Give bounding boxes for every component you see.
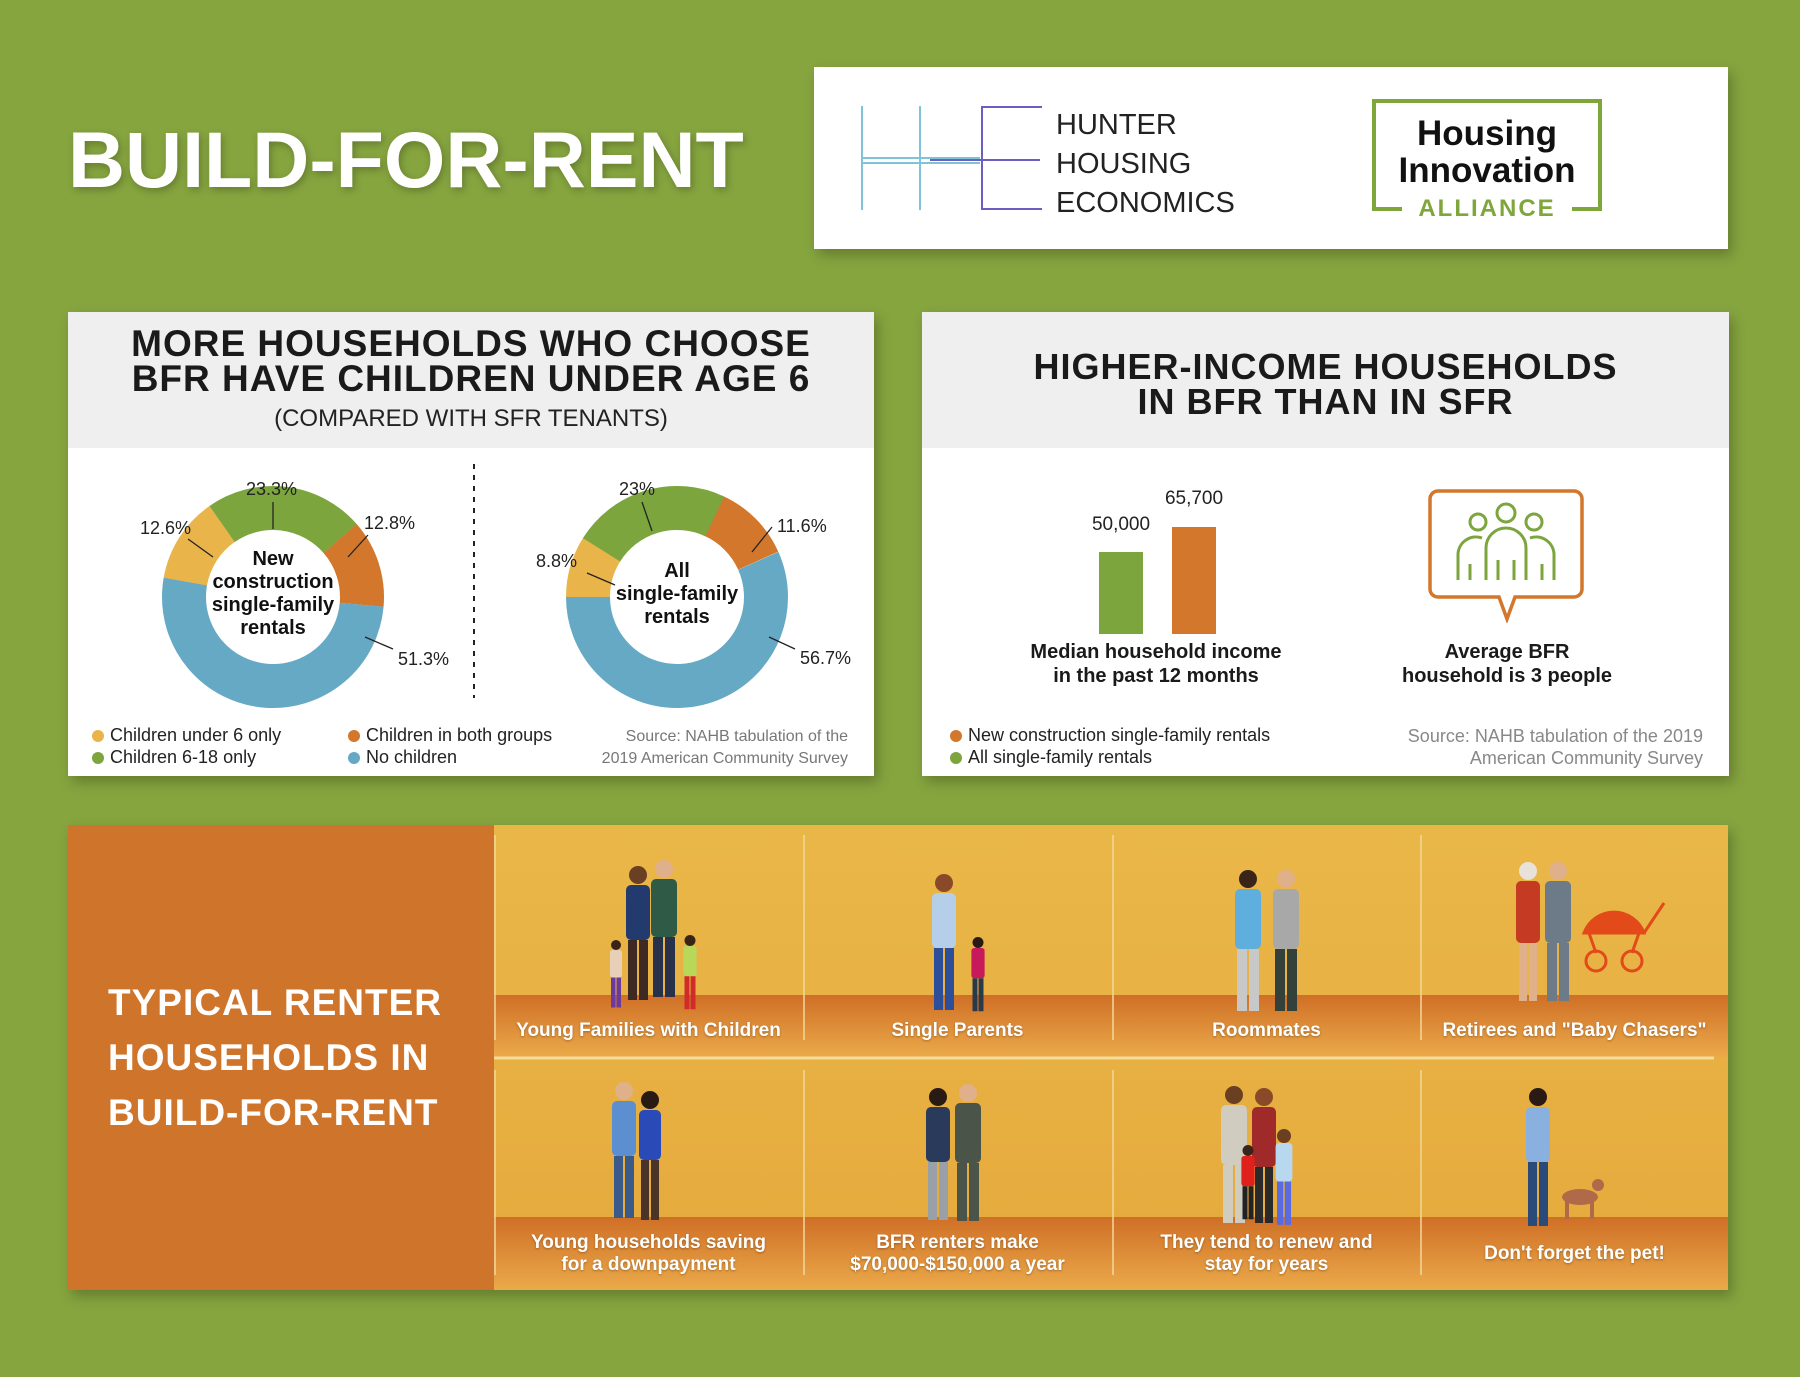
figures row 1	[610, 860, 1664, 1011]
heading: (COMPARED WITH SFR TENANTS)	[274, 405, 668, 432]
donut: all sfr: 56.7%	[800, 648, 851, 668]
legend: New construction single-family rentals	[968, 725, 1270, 745]
panel: typical renter households: Young households saving	[531, 1232, 766, 1253]
logo: housing innovation alliance	[1372, 99, 1602, 222]
panel: typical renter households: $70,000-$150,000 a year	[850, 1254, 1065, 1275]
tiles grid	[494, 825, 1728, 1290]
donut: new construction: 23.3%	[246, 479, 297, 499]
panel: children donuts	[68, 312, 874, 776]
panel: typical renter households: for a downpayment	[561, 1254, 736, 1275]
heading: BFR HAVE CHILDREN UNDER AGE 6	[132, 358, 810, 399]
source	[1408, 726, 1703, 768]
panel: typical renter households: BFR renters make	[876, 1232, 1039, 1253]
bar caption: in the past 12 months	[1053, 665, 1259, 687]
logo: hunter housing economics: HUNTER	[1056, 109, 1177, 141]
donut: new construction: 51.3%	[398, 649, 449, 669]
captions: Young Families with Children	[516, 1020, 781, 1041]
source: American Community Survey	[1470, 748, 1703, 768]
donut: new construction: New	[252, 548, 294, 570]
heading	[68, 312, 874, 448]
panel: children donuts: No children	[366, 747, 457, 767]
donut: all sfr: 11.6%	[777, 516, 827, 536]
side heading: BUILD-FOR-RENT	[108, 1092, 439, 1133]
divider	[473, 464, 475, 698]
donut charts	[140, 464, 851, 708]
legend: Children under 6 only	[110, 725, 281, 745]
panel: typical renter households: Single Parents	[892, 1020, 1024, 1041]
icon: family speech bubble	[1428, 489, 1584, 623]
icon caption	[1402, 641, 1612, 687]
title: BUILD-FOR-RENT	[68, 115, 744, 204]
donut: new construction: 12.6%	[140, 518, 191, 538]
donut: all sfr: 23%	[619, 479, 655, 499]
bar caption: Median household income	[1030, 641, 1282, 663]
bar chart: 65,700	[1165, 488, 1223, 509]
logo: housing innovation alliance: Housing	[1417, 114, 1557, 153]
source: 2019 American Community Survey	[602, 750, 848, 767]
bar caption	[1030, 641, 1282, 687]
panel: typical renter households	[68, 825, 1728, 1290]
panel: typical renter households: Roommates	[1212, 1020, 1321, 1041]
source	[602, 728, 848, 767]
side heading	[68, 825, 494, 1290]
donut: new construction	[140, 471, 449, 723]
panel: income: All single-family rentals	[968, 747, 1152, 767]
donut: all sfr	[536, 474, 851, 720]
logo: hunter housing economics: HOUSING	[1056, 148, 1191, 180]
donut: all sfr: rentals	[644, 606, 710, 628]
panel: typical renter households: They tend to renew and	[1160, 1232, 1373, 1253]
donut: new construction: single-family	[212, 594, 335, 616]
figures row 2	[612, 1082, 1604, 1226]
donut: all sfr: All	[664, 560, 690, 582]
panel: income	[922, 312, 1729, 776]
source: Source: NAHB tabulation of the	[626, 728, 848, 745]
logo: hunter housing economics	[861, 106, 1235, 219]
donut: all sfr: 8.8%	[536, 551, 577, 571]
side heading: HOUSEHOLDS IN	[108, 1037, 429, 1078]
logo: housing innovation alliance: ALLIANCE	[1418, 195, 1556, 222]
donut: new construction: construction	[212, 571, 334, 593]
logo panel	[814, 67, 1728, 249]
logo: housing innovation alliance: Innovation	[1399, 151, 1575, 190]
heading: MORE HOUSEHOLDS WHO CHOOSE	[131, 323, 811, 364]
source: Source: NAHB tabulation of the 2019	[1408, 726, 1703, 746]
panel: children donuts: Children in both groups	[366, 725, 552, 745]
side heading: TYPICAL RENTER	[108, 982, 442, 1023]
panel: typical renter households: Retirees and "Baby Chasers"	[1442, 1020, 1707, 1041]
panel: children donuts: Children 6-18 only	[110, 747, 256, 767]
bar chart	[1092, 488, 1223, 634]
logo: hunter housing economics: ECONOMICS	[1056, 187, 1235, 219]
icon caption: household is 3 people	[1402, 665, 1612, 687]
panel: typical renter households: stay for years	[1205, 1254, 1328, 1275]
panel: typical renter households: Don't forget the pet!	[1484, 1243, 1665, 1264]
heading: HIGHER-INCOME HOUSEHOLDS	[1033, 346, 1618, 387]
donut: new construction: 12.8%	[364, 513, 415, 533]
heading	[922, 312, 1729, 448]
heading: IN BFR THAN IN SFR	[1138, 381, 1513, 422]
icon caption: Average BFR	[1445, 641, 1569, 663]
donut: new construction: rentals	[240, 617, 306, 639]
bar chart: 50,000	[1092, 514, 1150, 535]
donut: all sfr: single-family	[616, 583, 739, 605]
